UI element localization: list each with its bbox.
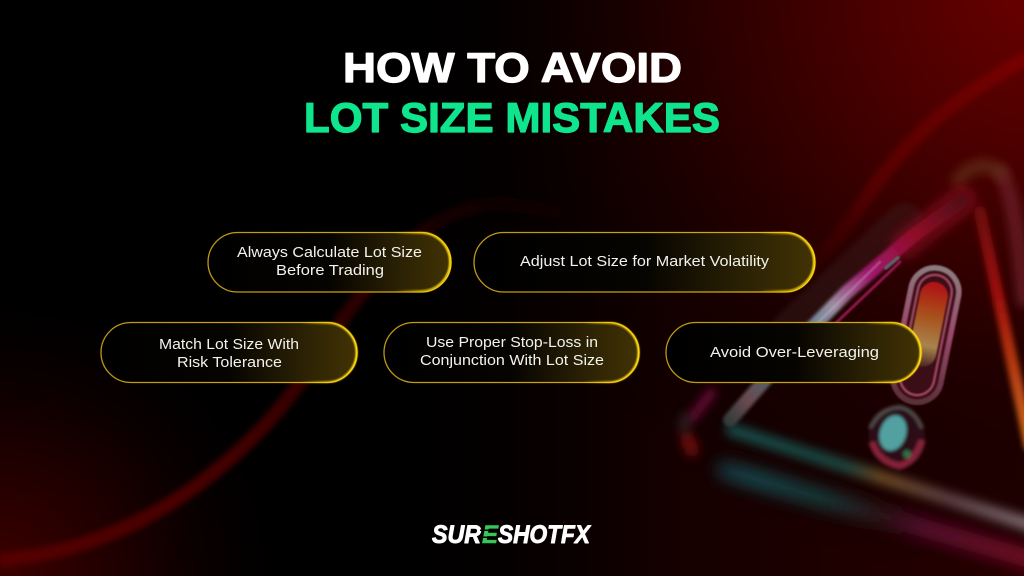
red curved ribbon, top right [755, 57, 1024, 320]
pill: match risk tolerance [101, 322, 357, 382]
pill: adjust for volatility [474, 232, 815, 292]
logo: SureShotFX [432, 521, 591, 549]
right edge [980, 212, 1024, 445]
apex bloom and right outer edge [1000, 172, 1024, 300]
logo: SureShotFX: SHOTFX [498, 521, 591, 549]
pill: stop-loss: Use Proper Stop-Loss in [426, 334, 598, 351]
pill: always calculate: Before Trading [276, 262, 384, 279]
pill: match risk tolerance: Risk Tolerance [177, 354, 282, 371]
pill: over-leveraging [666, 322, 921, 382]
pill: stop-loss [384, 322, 639, 382]
glass exclamation mark [859, 260, 967, 477]
title line 2: LOT SIZE MISTAKES [304, 94, 720, 141]
pill: always calculate: Always Calculate Lot Size [237, 244, 422, 261]
pill: match risk tolerance: Match Lot Size With [159, 336, 299, 353]
pill: always calculate [208, 232, 451, 292]
outer triangle, blurred [725, 470, 1024, 562]
inner bottom edge [732, 430, 1024, 528]
exclamation dot [859, 397, 935, 477]
logo: SureShotFX: SUR [432, 521, 481, 549]
glass warning triangle [684, 166, 1024, 562]
red curved ribbon, left [0, 203, 560, 560]
pill: stop-loss: Conjunction With Lot Size [420, 352, 604, 369]
exclamation bar [885, 260, 967, 410]
left edge [790, 222, 905, 330]
title line 1: HOW TO AVOID [343, 44, 682, 91]
pill: adjust for volatility: Adjust Lot Size for Market Volatility [520, 253, 770, 270]
title [304, 44, 720, 141]
logo: SureShotFX: E [482, 521, 499, 549]
pill: over-leveraging: Avoid Over-Leveraging [710, 344, 879, 361]
